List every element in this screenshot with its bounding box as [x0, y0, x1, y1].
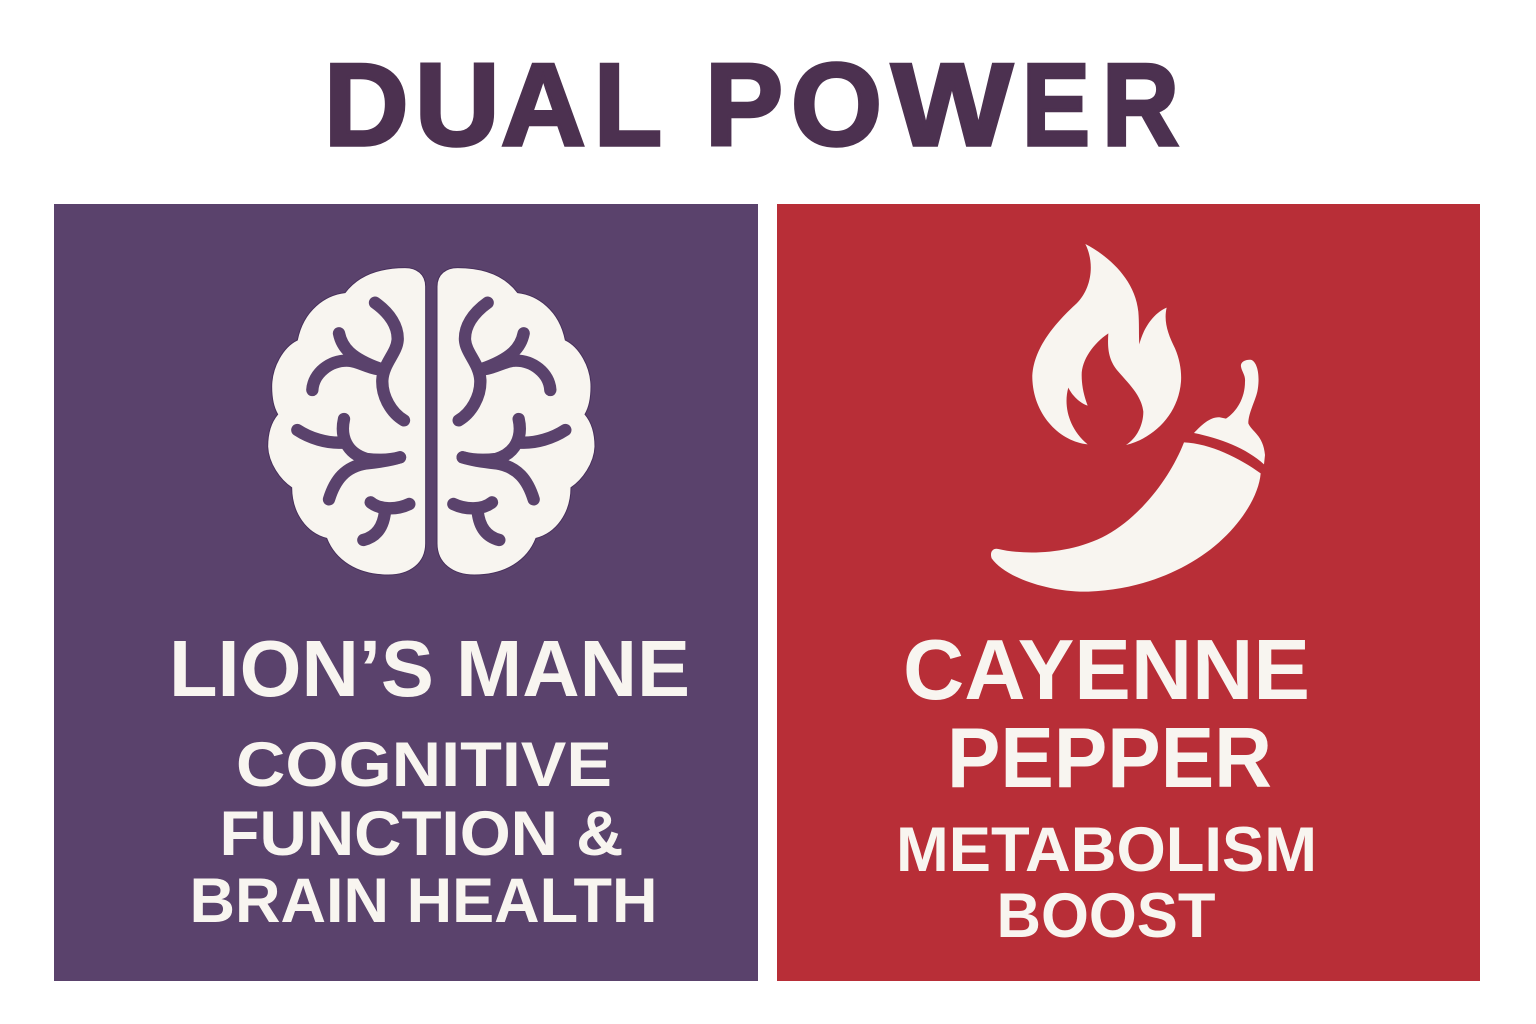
title: E — [1022, 39, 1090, 170]
text: metabolism boost: BOOST — [996, 881, 1216, 951]
text: cognitive function and brain health — [190, 730, 658, 936]
title: W — [892, 39, 1013, 170]
heading: lion's mane: LION’S MANE — [169, 624, 690, 713]
icon: pepper body — [991, 442, 1261, 592]
heading: cayenne pepper: PEPPER — [947, 711, 1272, 806]
heading: cayenne pepper — [903, 623, 1310, 806]
text: metabolism boost: METABOLISM — [896, 815, 1317, 885]
heading: cayenne pepper: CAYENNE — [903, 623, 1310, 718]
panel: cayenne pepper — [777, 204, 1480, 981]
text: cognitive function and brain health: FUNCTION & — [220, 799, 624, 869]
icon: flame — [1032, 244, 1181, 445]
text: cognitive function and brain health: BRAIN HEALTH — [190, 866, 658, 936]
title: PO — [705, 39, 882, 170]
icon: brain — [268, 268, 595, 575]
title: L — [594, 39, 660, 170]
icon: pepper stem — [1194, 360, 1265, 464]
panel: lion's mane — [54, 204, 758, 981]
title: DUA — [324, 39, 586, 170]
title: R — [1102, 39, 1179, 170]
text: cognitive function and brain health: COGNITIVE — [236, 730, 612, 800]
text: metabolism boost — [896, 815, 1317, 951]
title — [324, 39, 1179, 170]
icon: flame and pepper — [991, 244, 1265, 592]
